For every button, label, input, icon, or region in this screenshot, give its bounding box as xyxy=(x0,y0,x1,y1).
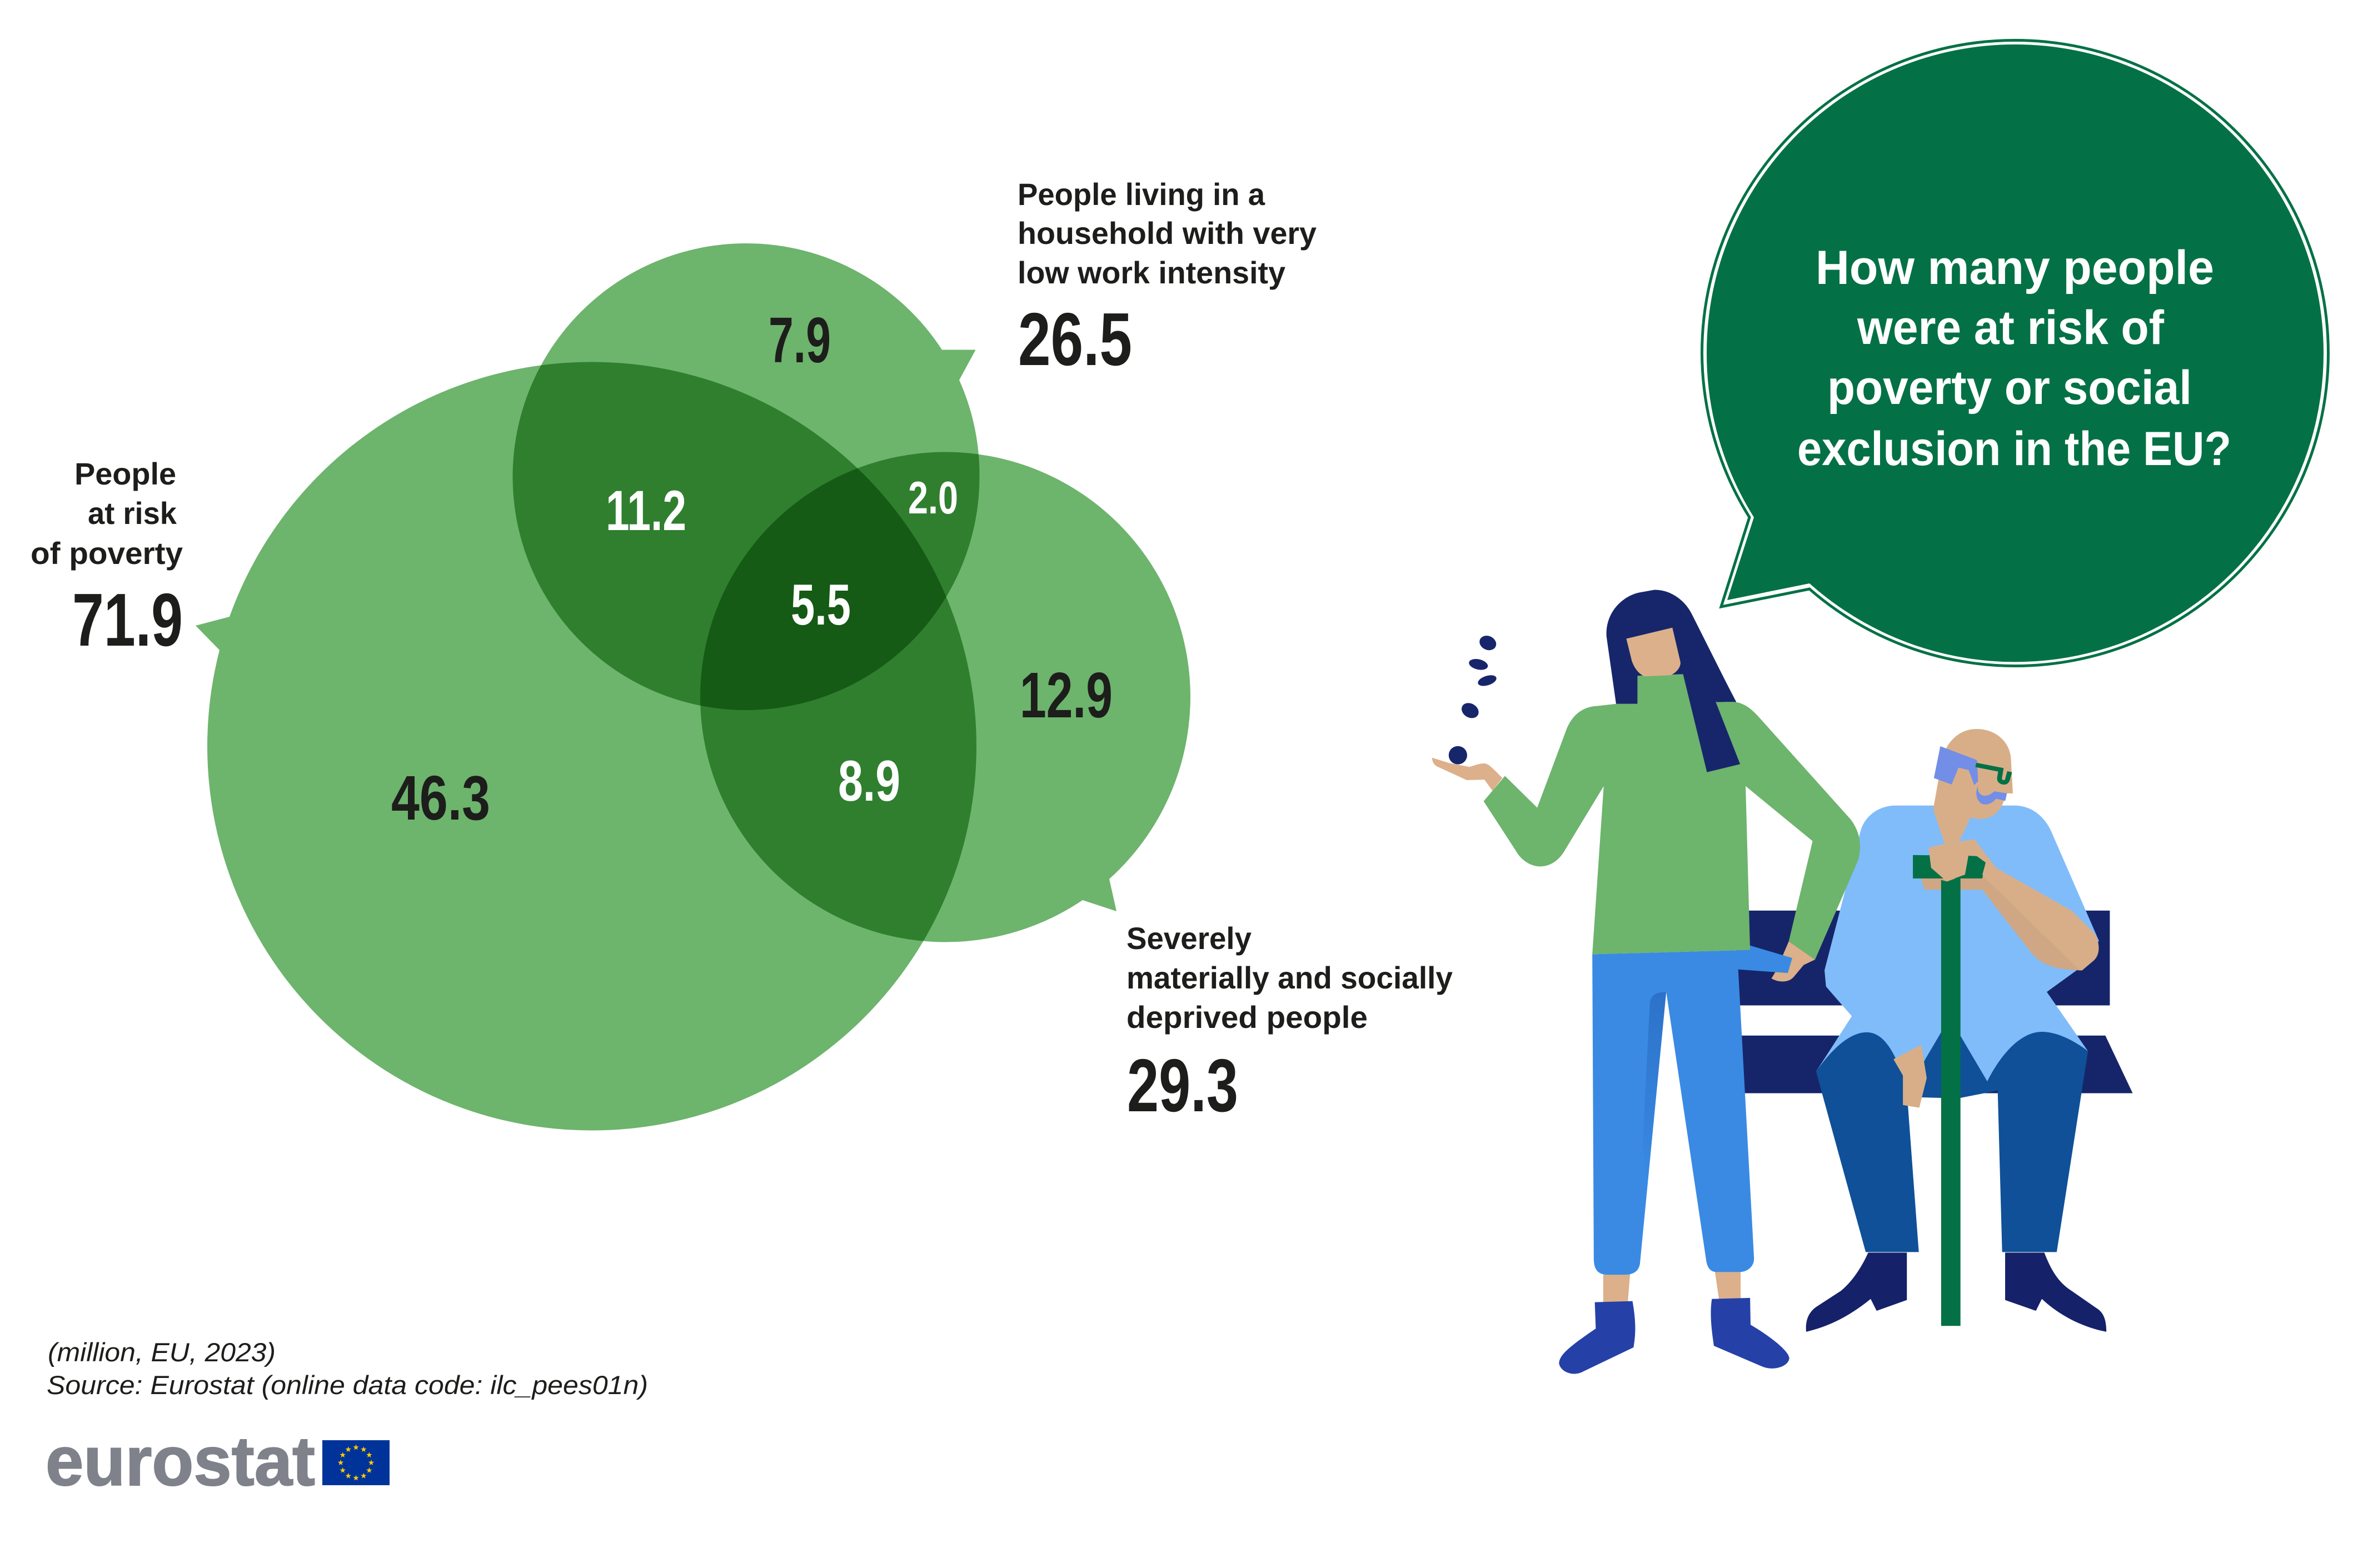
label: very low work intensity: low work intensity xyxy=(1018,255,1285,290)
shadow under hand xyxy=(1921,877,1983,890)
hair xyxy=(1607,590,1736,715)
knee hand xyxy=(1893,1045,1927,1108)
face and front hair xyxy=(1626,628,1740,772)
value: all three: 5.5 xyxy=(791,573,851,637)
question text: poverty or social xyxy=(1827,361,2192,415)
trousers xyxy=(1592,950,1754,1275)
label: people at risk of poverty: of poverty xyxy=(31,536,183,571)
head xyxy=(1933,729,2013,844)
label: severely materially and socially deprived xyxy=(1126,921,1453,1127)
value: poverty only: 46.3 xyxy=(391,763,490,833)
value: work intensity and deprived: 2.0 xyxy=(908,472,958,523)
question text: How many people xyxy=(1816,241,2214,294)
question text xyxy=(1797,241,2231,476)
label: very low work intensity: People living in a xyxy=(1018,177,1265,212)
label: people at risk of poverty: People xyxy=(74,456,176,491)
cane handle xyxy=(1913,855,1986,878)
label: people at risk of poverty: at risk xyxy=(88,496,177,531)
label: people at risk of poverty xyxy=(31,456,183,662)
hand on pocket xyxy=(1772,941,1815,981)
moustache xyxy=(1976,786,2007,805)
value: poverty and deprived: 8.9 xyxy=(838,749,900,813)
sweater xyxy=(1484,674,1860,960)
eurostat logo: eurostat xyxy=(46,1423,315,1500)
circle: very low work intensity xyxy=(512,243,980,710)
ankles xyxy=(1603,1269,1631,1305)
value: work intensity only: 7.9 xyxy=(769,304,831,376)
value: deprived only: 12.9 xyxy=(1020,659,1113,731)
figure: standing woman xyxy=(1432,590,1860,1374)
falling coins and hair back xyxy=(1432,590,1736,791)
label: severely materially and socially deprived: materially and socially xyxy=(1126,960,1453,995)
fist xyxy=(1928,839,1996,881)
cane xyxy=(1941,877,1961,1326)
head, arm and cane handle xyxy=(1913,729,2098,971)
source note: Source: Eurostat (online data code: ilc_pees01n) xyxy=(47,1370,648,1400)
speech bubble xyxy=(1702,41,2329,666)
EU flag xyxy=(322,1440,390,1485)
circle: people at risk of poverty xyxy=(196,362,976,1131)
question text: were at risk of xyxy=(1857,301,2164,354)
pocket xyxy=(1737,945,1792,973)
bench xyxy=(1737,911,2133,1093)
venn diagram xyxy=(196,243,1190,1131)
value: poverty and work intensity: 11.2 xyxy=(606,479,686,542)
label: severely materially and socially deprived: Severely xyxy=(1126,921,1252,956)
question text: exclusion in the EU? xyxy=(1797,422,2231,476)
body and legs xyxy=(1806,806,2106,1332)
woman shoes xyxy=(1559,1301,1635,1374)
figure: seated man xyxy=(1806,729,2106,1332)
trousers, shoes and sweater xyxy=(1484,674,1860,1374)
source note: (million, EU, 2023) xyxy=(48,1337,276,1367)
source note xyxy=(47,1337,648,1400)
label: people at risk of poverty: 71.9 xyxy=(72,578,183,662)
glasses xyxy=(1934,746,1978,785)
circle: severely materially and socially deprived xyxy=(700,452,1190,942)
label: very low work intensity: 26.5 xyxy=(1018,297,1132,381)
arm xyxy=(1982,868,2098,971)
label: very low work intensity xyxy=(1018,177,1317,381)
falling dots xyxy=(1449,633,1499,765)
label: severely materially and socially deprived: deprived people xyxy=(1126,1000,1368,1035)
raised hand xyxy=(1432,758,1502,791)
shoes xyxy=(1806,1252,1907,1332)
label: severely materially and socially deprived: 29.3 xyxy=(1127,1043,1238,1127)
label: very low work intensity: household with very xyxy=(1018,216,1317,251)
